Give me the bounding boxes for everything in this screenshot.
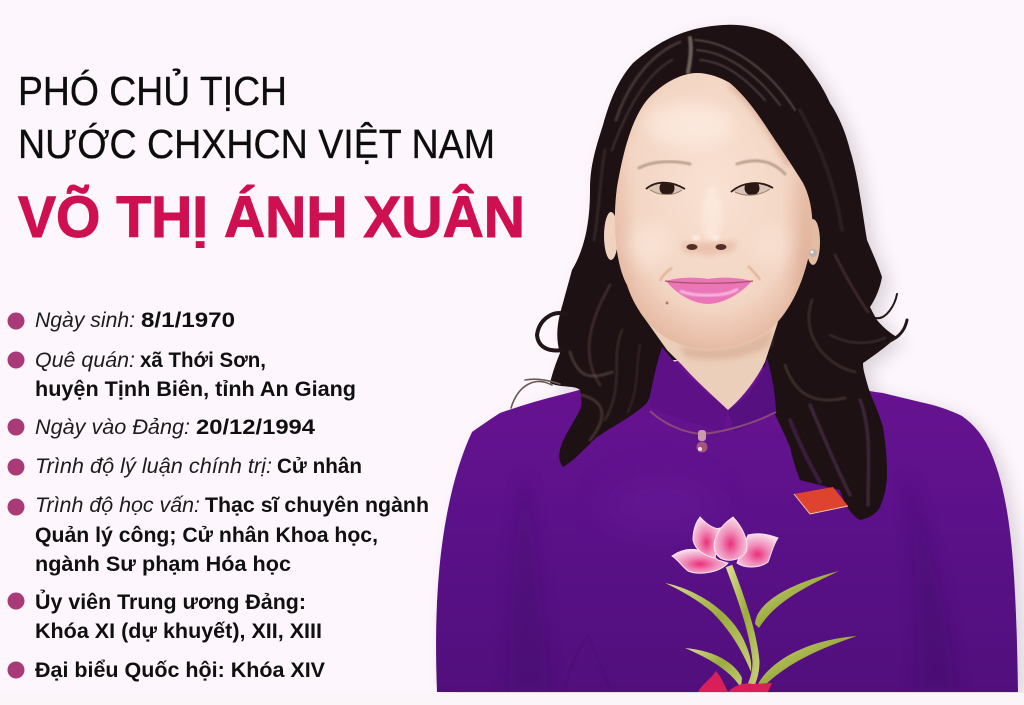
item: national assembly: Đại biểu Quốc hội: Khóa XIV [35, 659, 325, 682]
nose [682, 235, 736, 256]
lotus embroidery [665, 517, 857, 692]
leaf lower left [685, 648, 742, 688]
collar [648, 347, 776, 432]
item: party admission date [8, 416, 315, 439]
right collar flap [728, 358, 776, 432]
left collar flap [648, 347, 728, 432]
facial shading [612, 83, 817, 315]
leaf upper right [755, 571, 839, 628]
item: home town [8, 349, 356, 401]
item: birth date [8, 309, 235, 332]
lips [665, 278, 753, 304]
top hair highlights [594, 38, 842, 240]
eyebrows [639, 161, 785, 174]
item: home town: huyện Tịnh Biên, tỉnh An Giang [35, 378, 356, 401]
petal right [737, 534, 778, 567]
item: birth date: Ngày sinh: [35, 309, 135, 332]
necklace [650, 411, 776, 452]
national assembly badge [794, 487, 848, 514]
item: political theory level: Cử nhân [277, 455, 362, 478]
soft drop shadow [444, 30, 1024, 697]
dress shading [510, 470, 955, 692]
petal back [693, 517, 720, 558]
item: education: Quản lý công; Cử nhân Khoa học, [35, 524, 378, 547]
name heading: VÕ THỊ ÁNH XUÂN [18, 185, 525, 250]
item: central committee [8, 590, 322, 643]
item: political theory level [8, 455, 362, 478]
item: party admission date: 20/12/1994 [196, 416, 315, 439]
lower hair strands [570, 255, 885, 505]
ears and earring [604, 212, 820, 265]
title: NƯỚC CHXHCN VIỆT NAM [18, 121, 495, 167]
item: party admission date: Ngày vào Đảng: [35, 416, 190, 439]
stem [729, 566, 756, 691]
eyes [646, 180, 773, 196]
item: political theory level: Trình độ lý luận chính trị: [35, 455, 272, 478]
item: education: Trình độ học vấn: [35, 494, 200, 517]
item: home town: Quê quán: [35, 349, 135, 372]
item: central committee: Ủy viên Trung ương Đảng: [35, 590, 306, 614]
petal centre [714, 517, 747, 560]
face [612, 73, 817, 349]
bottom strip [0, 693, 1024, 705]
item: education [8, 494, 429, 576]
item: education: Thạc sĩ chuyên ngành [205, 494, 429, 517]
title [18, 68, 495, 167]
petal left [672, 549, 728, 573]
lower flower [698, 671, 772, 692]
title: PHÓ CHỦ TỊCH [18, 68, 287, 114]
item: education: ngành Sư phạm Hóa học [35, 553, 291, 576]
loose curls and wisps [511, 294, 907, 408]
item: home town: xã Thới Sơn, [140, 349, 266, 372]
purple áo dài [436, 360, 1018, 692]
neck [640, 312, 778, 410]
hair [511, 25, 907, 520]
portrait of Võ Thị Ánh Xuân [436, 25, 1024, 697]
leaf upper left [665, 583, 751, 672]
item: birth date: 8/1/1970 [141, 309, 235, 332]
item: central committee: Khóa XI (dự khuyết), XII, XIII [35, 620, 322, 643]
biography list [8, 309, 429, 682]
leaf lower right [758, 636, 857, 688]
